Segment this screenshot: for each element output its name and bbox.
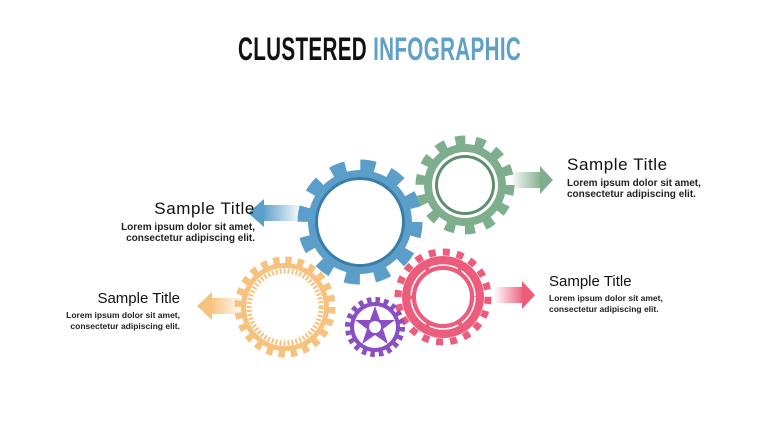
gear: blue — [303, 165, 417, 279]
text block: top left: Lorem ipsum dolor sit amet, — [121, 222, 255, 233]
text block: top left: consectetur adipiscing elit. — [126, 233, 255, 244]
text block: top right: consectetur adipiscing elit. — [567, 189, 696, 200]
text block: top right: Sample Title — [567, 155, 668, 174]
text block: top left — [121, 199, 255, 244]
text block: bottom right: consectetur adipiscing elit. — [549, 304, 659, 314]
text block: bottom left: Lorem ipsum dolor sit amet, — [66, 310, 180, 320]
arrow: green right — [510, 166, 553, 194]
text block: top right: Lorem ipsum dolor sit amet, — [567, 178, 701, 189]
text block: bottom left: Sample Title — [97, 290, 180, 307]
gear: pink — [398, 252, 488, 342]
arrow: yellow left — [197, 292, 244, 320]
arrow: pink right — [494, 281, 535, 309]
text block: top left: Sample Title — [154, 199, 255, 218]
text block: bottom right: Lorem ipsum dolor sit amet, — [549, 293, 663, 303]
gear: yellow — [238, 260, 332, 354]
text block: top right — [567, 155, 701, 200]
text block: bottom right — [549, 273, 663, 314]
text block: bottom left — [66, 290, 180, 331]
text block: bottom right: Sample Title — [549, 273, 632, 290]
arrow: blue left — [248, 199, 302, 227]
title: CLUSTERED INFOGRAPHIC — [238, 31, 521, 67]
gear: green — [420, 140, 510, 230]
text block: bottom left: consectetur adipiscing elit. — [70, 321, 180, 331]
gear: purple — [348, 300, 402, 354]
